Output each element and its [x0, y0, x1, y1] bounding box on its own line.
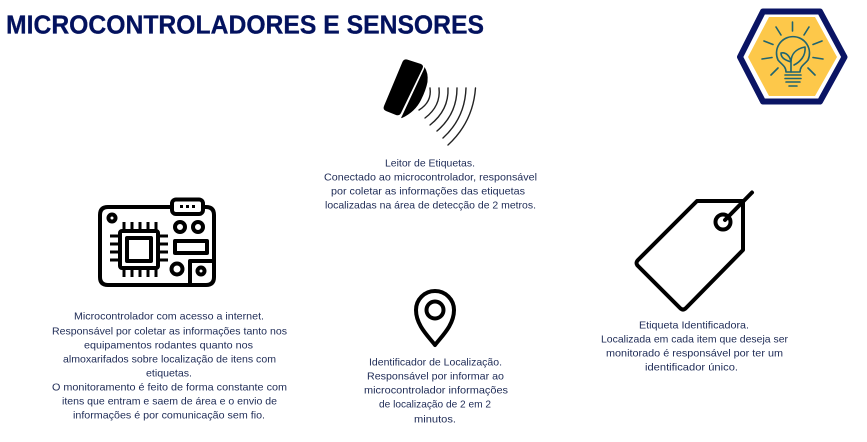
text: leitor description: Leitor de Etiquetas.	[385, 158, 475, 170]
icon: tag reader	[384, 59, 476, 145]
text: microcontrolador description: etiquetas.	[146, 368, 192, 380]
panel: microcontrolador	[52, 200, 287, 422]
text: localização description	[364, 356, 508, 426]
panel: identificador de localização	[364, 291, 508, 426]
text: leitor description: por coletar as informações das etiquetas	[331, 186, 525, 198]
text: microcontrolador description	[52, 310, 287, 422]
icon: circuit board	[100, 200, 214, 285]
title: MICROCONTROLADORES E SENSORES	[6, 12, 484, 40]
text: localização description: Identificador de Localização.	[369, 356, 502, 368]
panel: leitor de etiquetas	[324, 59, 537, 212]
text: microcontrolador description: equipamentos rodantes quanto nos	[84, 340, 253, 352]
text: etiqueta description: Localizada em cada item que deseja ser	[601, 334, 788, 346]
text: leitor description: Conectado ao microcontrolador, responsável	[324, 172, 537, 184]
text: etiqueta description: Etiqueta Identificadora.	[639, 320, 749, 332]
text: etiqueta description: identificador único.	[645, 362, 738, 374]
text: etiqueta description: monitorado é responsável por ter um	[606, 348, 783, 360]
icon: location pin	[416, 291, 454, 345]
text: leitor description: localizadas na área de detecção de 2 metros.	[325, 200, 536, 212]
text: localização description: microcontrolador informações	[364, 384, 508, 396]
text: microcontrolador description: itens que entram e saem de área e o envio de	[62, 396, 277, 408]
icon: price tag	[636, 192, 752, 310]
text: microcontrolador description: Responsável por coletar as informações tanto nos	[52, 326, 287, 338]
text: microcontrolador description: Microcontrolador com acesso a internet.	[74, 310, 264, 322]
text: localização description: minutos.	[414, 414, 456, 426]
text: leitor description	[324, 158, 537, 212]
text: localização description: Responsável por informar ao	[367, 370, 504, 382]
text: microcontrolador description: almoxarifados sobre localização de itens com	[63, 354, 276, 366]
text: microcontrolador description: informações é por comunicação sem fio.	[73, 410, 265, 422]
text: localização description: de localização de 2 em 2	[379, 398, 491, 410]
icon: lightbulb hexagon logo	[740, 12, 844, 102]
text: microcontrolador description: O monitoramento é feito de forma constante com	[52, 382, 287, 394]
panel: etiqueta identificadora	[601, 192, 788, 374]
text: etiqueta description	[601, 320, 788, 374]
